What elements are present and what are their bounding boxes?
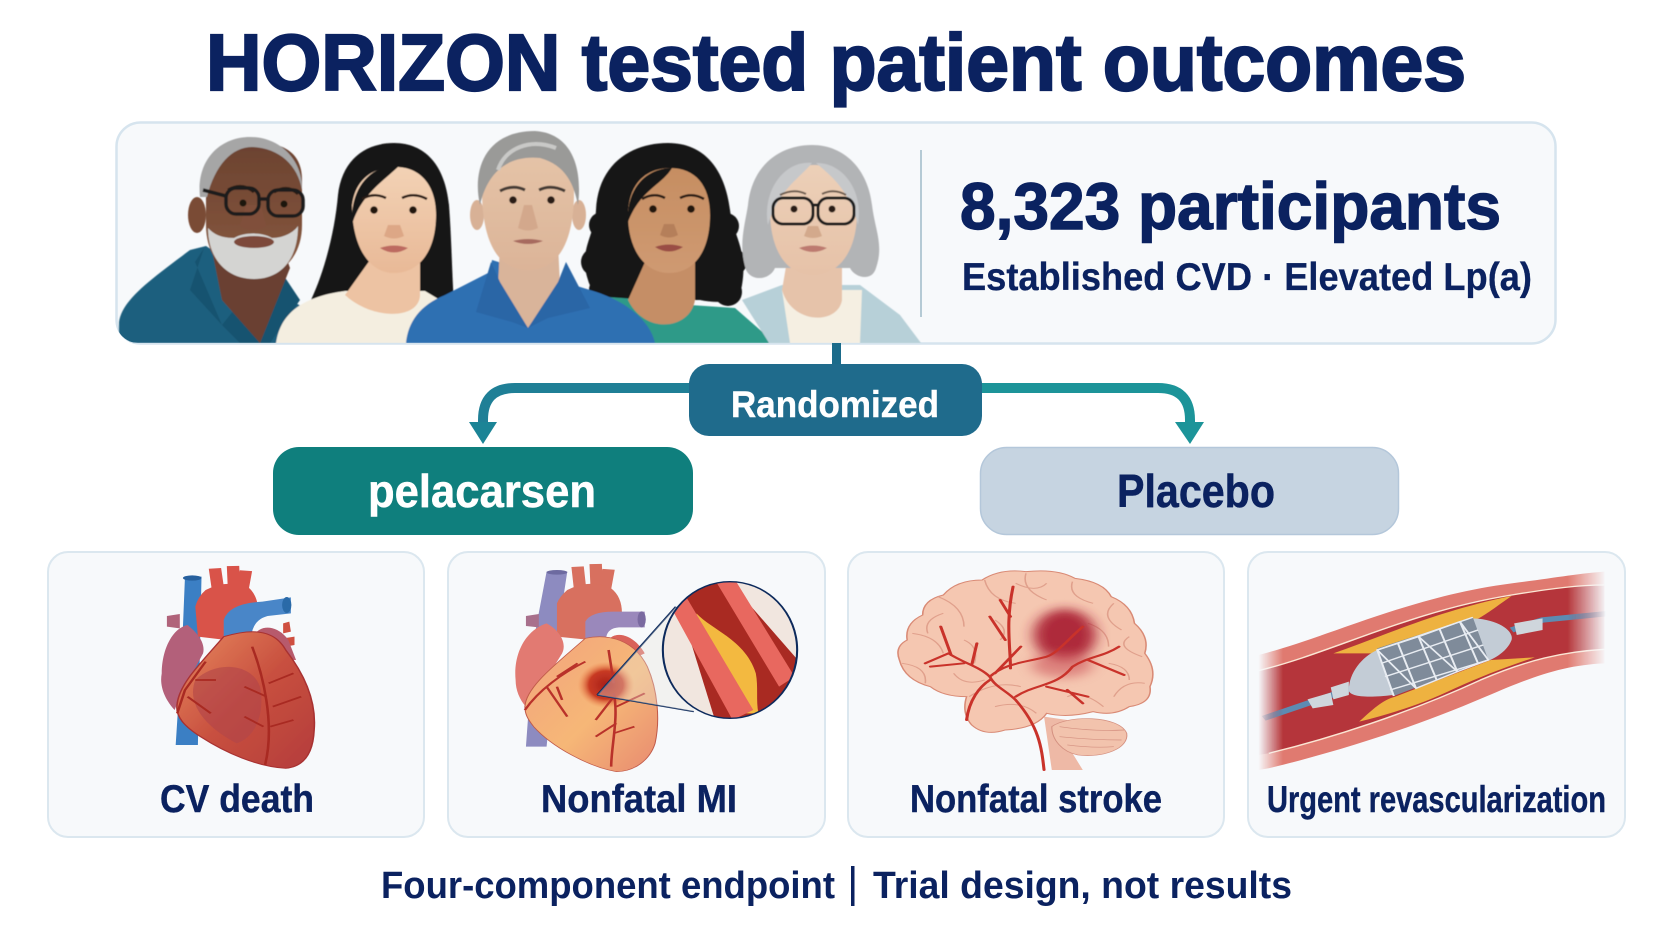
flow: connector stem (832, 343, 841, 367)
arrow: to placebo (980, 388, 1204, 444)
icon: heart (161, 566, 314, 768)
arm: placebo (980, 448, 1398, 534)
person 4: woman with wavy black hair (581, 143, 775, 343)
population description: Established CVD · Elevated Lp(a) (962, 256, 1532, 299)
icon: heart with plaque inset (515, 564, 815, 772)
card: nonfatal MI: Nonfatal MI (541, 778, 737, 821)
card: CV death (48, 552, 424, 837)
box: randomized (689, 364, 982, 436)
card: nonfatal stroke: Nonfatal stroke (910, 778, 1162, 821)
icon: stent in artery (1258, 572, 1610, 770)
arm: pelacarsen (273, 447, 693, 535)
arrow: to pelacarsen (469, 388, 692, 444)
arm: placebo: Placebo (1117, 465, 1275, 517)
icon: brain with stroke area (898, 571, 1153, 770)
card: urgent revascularization (1248, 552, 1625, 837)
card: CV death: CV death (160, 778, 314, 821)
card: nonfatal stroke (848, 552, 1224, 837)
footer note (381, 865, 1292, 907)
person 1: older man with glasses and beard (119, 137, 312, 343)
panel: participants (116, 122, 1556, 344)
footer note: Trial design, not results (873, 865, 1292, 907)
person 2: woman with long black hair (276, 143, 455, 343)
person 5: older woman with grey hair and glasses (742, 145, 921, 343)
arm: pelacarsen: pelacarsen (368, 465, 596, 517)
participants count: 8,323 participants (960, 169, 1501, 243)
box: randomized: Randomized (731, 384, 939, 425)
footer note: Four-component endpoint (381, 865, 835, 907)
title: HORIZON tested patient outcomes (206, 18, 1466, 107)
card: nonfatal MI (448, 552, 825, 837)
person 3: grey-haired man in blue polo (406, 131, 655, 343)
image: five participants (119, 131, 921, 343)
divider (920, 150, 922, 317)
